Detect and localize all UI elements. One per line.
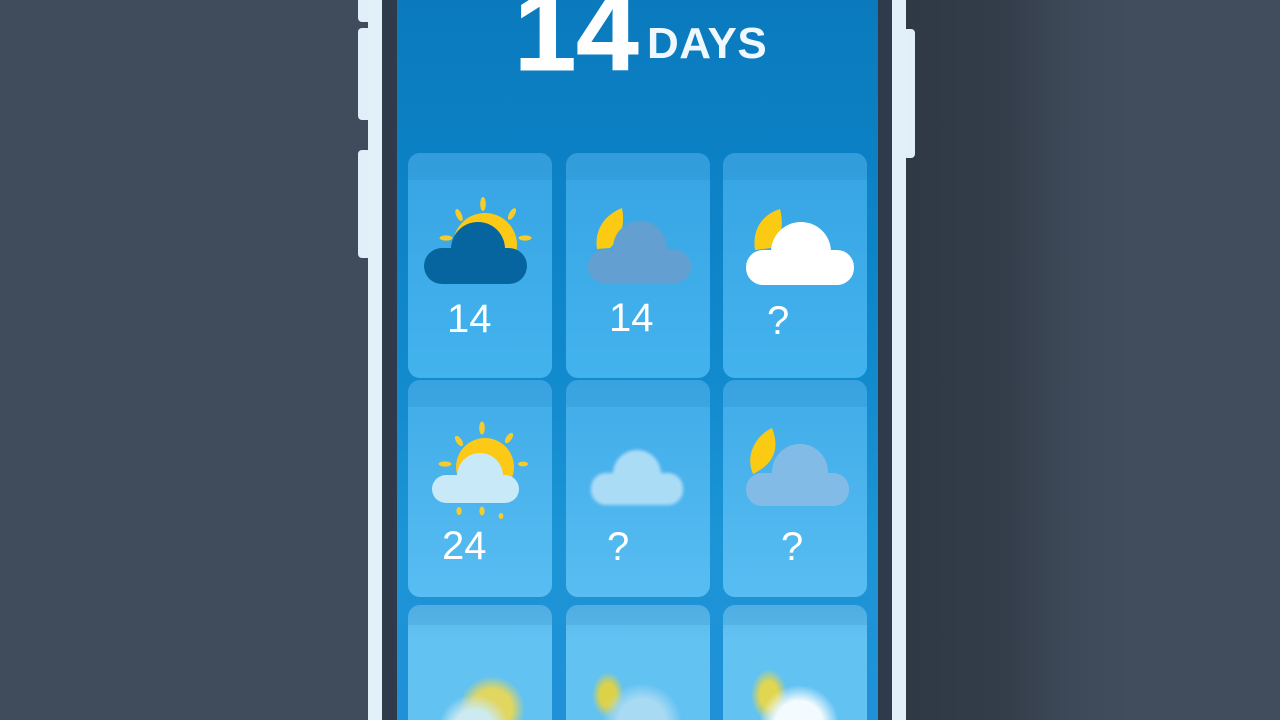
DAYS label: DAYS (647, 19, 767, 68)
day value: 24 (442, 524, 486, 568)
card row 3 col 3: blurred moon and white cloud (723, 605, 867, 720)
card row 2 col 2: faded cloud, ? (566, 380, 710, 597)
card row 1 col 1: sun behind dark cloud, 14 (408, 153, 552, 378)
phone bezel (382, 0, 892, 720)
phone screen (397, 0, 878, 720)
icon: blurred moon and white cloud (723, 665, 867, 720)
unknown value: ? (607, 525, 629, 569)
unknown value: ? (781, 525, 803, 569)
card row 2 col 1: sun with pale cloud, 24 (408, 380, 552, 597)
icon: sun, pale cloud, drops (432, 422, 528, 519)
icon: moon and muted cloud (588, 208, 691, 283)
day value: 14 (609, 296, 654, 340)
background shadow cast by phone (906, 0, 1280, 720)
headline: 14 days (514, 0, 767, 94)
phone frame (368, 0, 906, 720)
card row 1 col 2: moon with grey cloud, 14 (566, 153, 710, 378)
icon: moon and light grey-blue cloud (746, 428, 849, 506)
left phone side buttons (358, 0, 368, 258)
card grid (408, 153, 867, 720)
card row 1 col 3: moon with white cloud, ? (723, 153, 867, 378)
right phone side button (903, 29, 915, 158)
card row 3 col 1: blurred sun and cloud (408, 605, 552, 720)
icon: faded cloud (589, 448, 685, 507)
icon: blurred sun and cloud (408, 665, 552, 720)
card row 2 col 3: moon with muted cloud, ? (723, 380, 867, 597)
card row 3 col 2: blurred moon and cloud (566, 605, 710, 720)
icon: sun and dark cloud (424, 197, 532, 284)
icon: blurred moon and cloud (566, 665, 710, 720)
day value: 14 (447, 297, 492, 341)
icon: moon and white cloud (746, 209, 854, 285)
unknown value: ? (767, 299, 789, 343)
